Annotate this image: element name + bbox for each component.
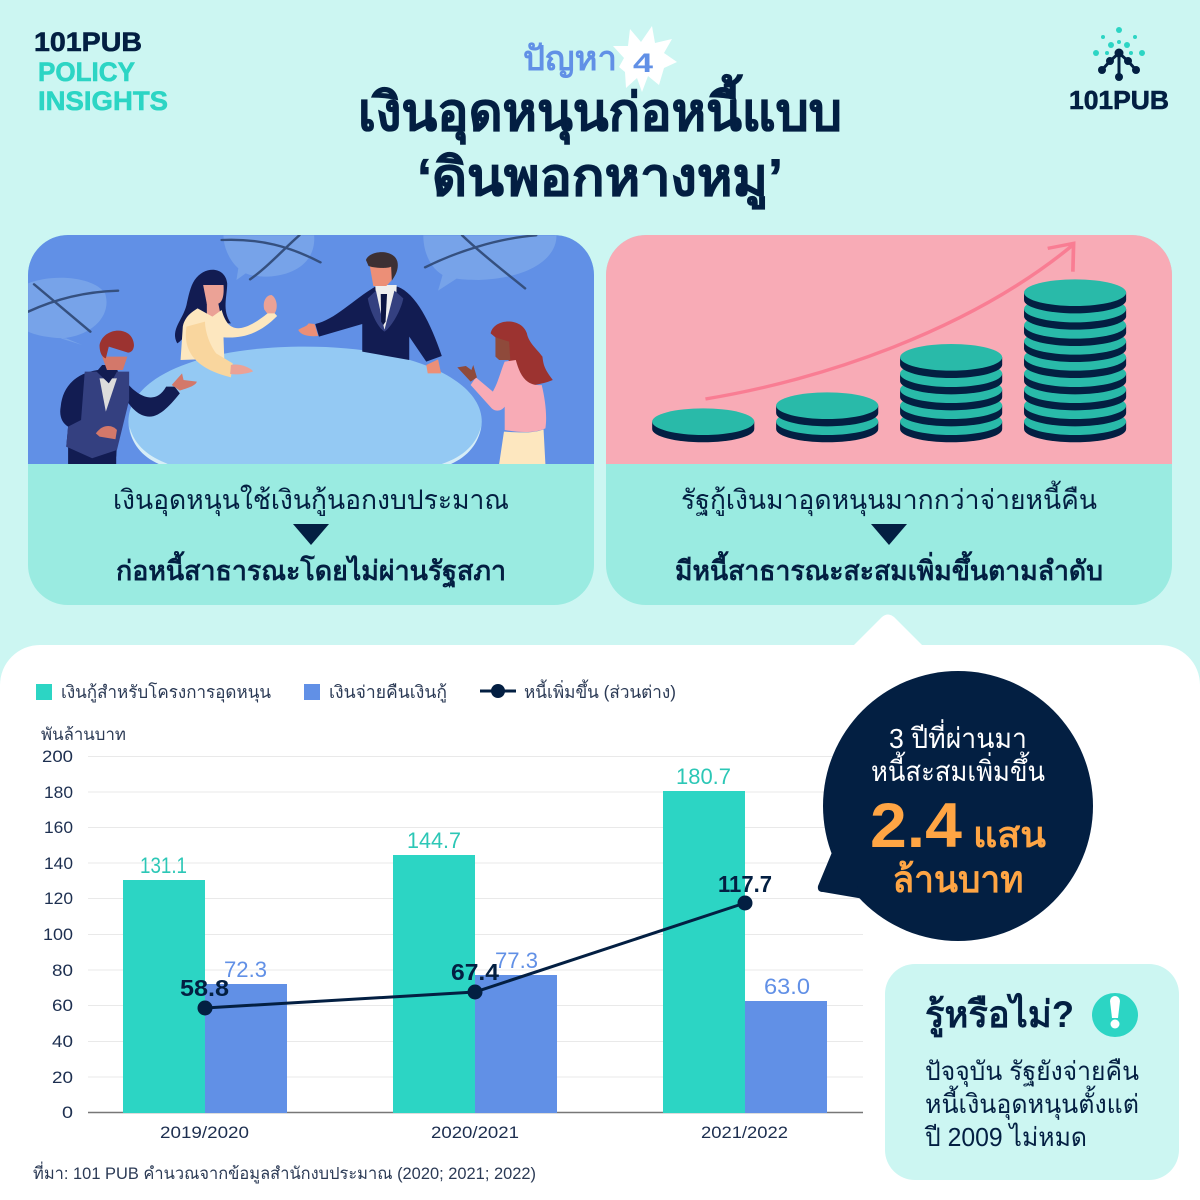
logo: 101PUB Policy Insights: INSIGHTS — [38, 86, 168, 116]
bar chart: 67.4 — [451, 959, 499, 985]
bar chart: 63.0 — [764, 974, 810, 999]
bar chart: 140 — [44, 854, 73, 873]
bar chart: 2019/2020 — [160, 1123, 249, 1142]
source note: ที่มา: 101 PUB คำนวณจากข้อมูลสำนักงบประมาณ (2020; 2021; 2022) — [33, 1161, 536, 1184]
illustration: coin stacks with rising arrow — [606, 235, 1172, 464]
logo: 101PUB Policy Insights — [34, 27, 168, 116]
logo: 101PUB network mark — [1069, 27, 1169, 115]
callout: accumulated debt: หนี้สะสมเพิ่มขึ้น — [871, 751, 1045, 787]
panel: did you know: รู้หรือไม่? — [925, 992, 1074, 1038]
legend: เงินจ่ายคืนเงินกู้ — [329, 682, 447, 703]
icon: exclamation mark — [1092, 993, 1138, 1037]
text: left caption: ก่อหนี้สาธารณะโดยไม่ผ่านรัฐสภา — [116, 550, 506, 589]
text: left caption — [113, 484, 509, 589]
bar chart: 120 — [44, 889, 73, 908]
heading: problem number: 4 — [633, 48, 653, 78]
bar chart: 144.7 — [407, 828, 461, 853]
panel: left, meeting — [28, 235, 594, 605]
heading: problem number: ปัญหา — [523, 40, 617, 79]
bar chart: 2021/2022 — [701, 1123, 788, 1142]
callout: accumulated debt: 2.4 — [870, 791, 962, 861]
bar chart: พันล้านบาท — [41, 725, 126, 744]
bar chart: 72.3 — [224, 957, 267, 982]
callout: accumulated debt — [818, 671, 1093, 941]
legend — [36, 679, 676, 703]
legend: หนี้เพิ่มขึ้น (ส่วนต่าง) — [524, 679, 676, 702]
title — [358, 74, 842, 210]
bar chart: 80 — [52, 961, 73, 980]
bar chart: 0 — [62, 1103, 73, 1122]
bar chart: 117.7 — [718, 871, 772, 897]
person: man in suit — [315, 287, 442, 362]
callout: accumulated debt: ล้านบาท — [892, 859, 1024, 900]
logo: 101PUB Policy Insights: POLICY — [38, 57, 135, 87]
callout: accumulated debt: 3 ปีที่ผ่านมา — [889, 719, 1027, 754]
panel: did you know — [885, 964, 1179, 1180]
bar chart: 40 — [52, 1032, 73, 1051]
bar chart: 100 — [43, 925, 73, 944]
person: seated woman — [175, 270, 231, 343]
bar chart: 160 — [44, 818, 73, 837]
text: right caption — [675, 480, 1103, 586]
text: right caption: มีหนี้สาธารณะสะสมเพิ่มขึ้นตามลำดับ — [675, 550, 1103, 586]
panel: did you know: ปี 2009 ไม่หมด — [924, 1122, 1087, 1152]
panel: did you know: หนี้เงินอุดหนุนตั้งแต่ — [925, 1085, 1139, 1120]
logo: 101PUB network mark: 101PUB — [1069, 85, 1169, 115]
legend: เงินกู้สำหรับโครงการอุดหนุน — [61, 682, 271, 703]
callout: accumulated debt: แสน — [973, 814, 1046, 855]
text: right caption: รัฐกู้เงินมาอุดหนุนมากกว่าจ่ายหนี้คืน — [681, 480, 1097, 517]
bar chart — [41, 725, 863, 1142]
person: man with waistcoat — [68, 448, 116, 464]
bar chart: 77.3 — [495, 948, 538, 973]
bar chart: 20 — [52, 1068, 73, 1087]
title: เงินอุดหนุนก่อหนี้แบบ — [358, 74, 842, 145]
bar chart: 180.7 — [676, 764, 731, 789]
illustration: people arguing around a table — [28, 235, 594, 464]
text: left caption: เงินอุดหนุนใช้เงินกู้นอกงบประมาณ — [113, 484, 509, 517]
bar chart: 2020/2021 — [431, 1123, 519, 1142]
panel: white chart area — [0, 614, 1200, 1200]
bar chart: 131.1 — [140, 853, 187, 878]
bar chart: 180 — [44, 783, 73, 802]
person: woman in pink — [491, 321, 553, 387]
table — [128, 347, 482, 464]
bar chart: 60 — [52, 996, 73, 1015]
logo: 101PUB Policy Insights: 101PUB — [34, 27, 142, 57]
heading: problem number — [523, 26, 677, 92]
bar chart: 58.8 — [180, 975, 229, 1001]
title: ‘ดินพอกหางหมู’ — [417, 149, 783, 210]
panel: right, rising debt — [606, 235, 1172, 605]
panel: did you know: ปัจจุบัน รัฐยังจ่ายคืน — [925, 1056, 1139, 1087]
bar chart: 200 — [42, 747, 73, 766]
